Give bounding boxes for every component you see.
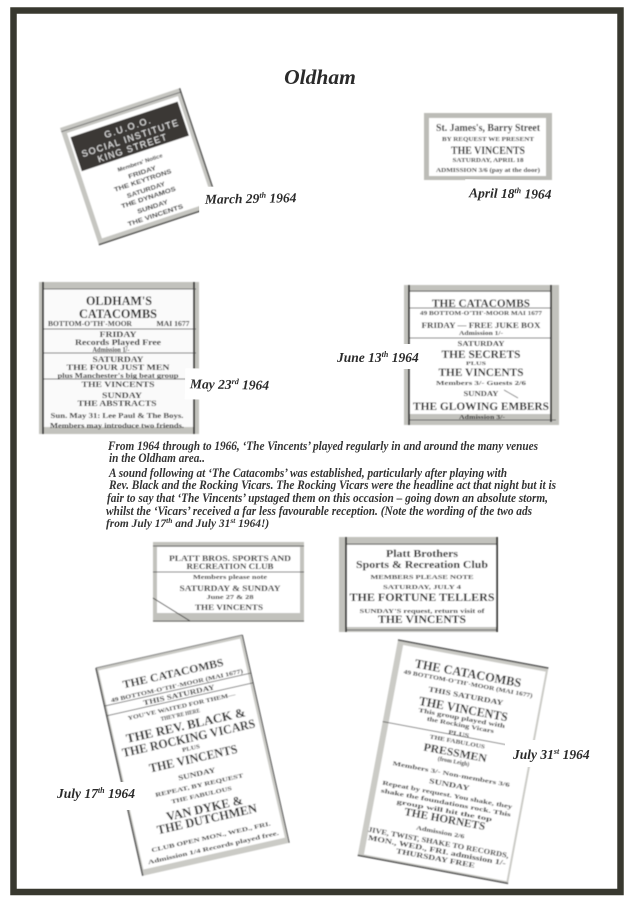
date label: July 17th 1964: July 17 bbox=[57, 786, 98, 801]
ad: Oldham's Catacombs: plus Manchester's big beat group bbox=[58, 372, 179, 380]
ad: G.U.O.O. Social Institute: FRIDAY bbox=[128, 166, 157, 181]
dark heading band bbox=[70, 102, 189, 171]
date label: July 31st 1964: 1964 bbox=[559, 747, 590, 762]
ad: The Catacombs, July 31st: THE FABULOUS bbox=[429, 734, 486, 751]
text block bbox=[106, 439, 556, 530]
date label: May 23rd 1964 bbox=[185, 368, 277, 401]
date label: July 17th 1964: th bbox=[98, 786, 105, 795]
ad: Platt Brothers Sports & Recreation Club: THE VINCENTS bbox=[378, 614, 466, 626]
ad: The Catacombs, July 31st: THURSDAY FREE bbox=[395, 847, 476, 870]
ad: The Catacombs, July 31st: Admission 2/6 bbox=[416, 826, 465, 841]
date label: March 29th 1964 bbox=[199, 185, 310, 217]
ad: The Catacombs, June: 49 BOTTOM-O'TH'-MOOR MAI 1677 bbox=[420, 310, 543, 317]
ad: Platt Bros. Sports and Recreation Club: RECREATION CLUB bbox=[186, 562, 274, 571]
text block: fair to say that ‘The Vincents’ upstaged them on this occasion – going down an absolute storm, bbox=[107, 491, 548, 505]
ad: The Catacombs, June: THE GLOWING EMBERS bbox=[413, 399, 549, 413]
ad: The Catacombs, July 17th: THE CATACOMBS bbox=[121, 655, 225, 691]
ad: The Catacombs, July 17th: THE DUTCHMEN bbox=[156, 801, 258, 837]
ad: The Catacombs, June: PLUS bbox=[466, 361, 486, 367]
date label: June 13th 1964: 1964 bbox=[388, 350, 419, 365]
ad: The Catacombs, July 17th: 49 BOTTOM-O'TH'-MOOR (MAI 1677) bbox=[110, 668, 244, 704]
ad: The Catacombs, June: THE VINCENTS bbox=[438, 365, 524, 379]
date label: March 29th 1964: March 29 bbox=[205, 191, 259, 207]
ad: The Catacombs, June bbox=[404, 285, 559, 425]
text block: 1964!) bbox=[235, 518, 269, 530]
ad: Platt Brothers Sports & Recreation Club: SUNDAY'S request, return visit of bbox=[360, 608, 486, 615]
ad: The Catacombs, July 31st: PLUS bbox=[448, 729, 470, 740]
ad: St. James's, Barry Street: ADMISSION 3/6 (pay at the door) bbox=[436, 167, 540, 174]
ad: The Catacombs, July 31st: SUNDAY bbox=[428, 776, 471, 793]
ad: G.U.O.O. Social Institute bbox=[60, 88, 218, 245]
ad: Oldham's Catacombs: CATACOMBS bbox=[79, 306, 157, 321]
ad: Oldham's Catacombs: SUNDAY bbox=[102, 391, 142, 400]
ad: Platt Bros. Sports and Recreation Club: June 27 & 28 bbox=[206, 595, 254, 601]
date label: April 18th 1964 bbox=[465, 179, 575, 209]
ad: The Catacombs, July 17th: PLUS bbox=[182, 744, 201, 754]
ad: G.U.O.O. Social Institute: SATURDAY bbox=[126, 182, 166, 200]
ad: Platt Bros. Sports and Recreation Club bbox=[153, 542, 304, 622]
ad: Oldham's Catacombs: Sun. May 31: Lee Paul & The Boys. bbox=[50, 412, 184, 420]
text block: and July 31 bbox=[172, 518, 230, 530]
ad: G.U.O.O. Social Institute: G.U.O.O. bbox=[103, 115, 152, 140]
ad: The Catacombs, June: Members 3/- Guests 2/6 bbox=[436, 381, 526, 387]
text block: Rev. Black and the Rocking Vicars. The Rocking Vicars were the headline act that night but it is bbox=[108, 478, 556, 492]
ad: Platt Brothers Sports & Recreation Club: Sports & Recreation Club bbox=[356, 560, 488, 571]
date label: April 18th 1964: 1964 bbox=[521, 186, 552, 202]
date label: March 29th 1964: th bbox=[259, 191, 267, 200]
ad: The Catacombs, July 17th: Admission 1/4 Records played free. bbox=[147, 830, 280, 866]
ad: The Catacombs, July 31st: MON., WED., FRI. admission 1/- bbox=[367, 834, 507, 868]
ad: The Catacombs, July 31st: This group played with bbox=[418, 707, 506, 730]
ad: Oldham's Catacombs: SATURDAY bbox=[92, 355, 144, 364]
ad: Platt Brothers Sports & Recreation Club bbox=[339, 537, 498, 632]
date label: June 13th 1964 bbox=[333, 344, 423, 369]
ad: St. James's, Barry Street bbox=[424, 113, 552, 180]
ad: The Catacombs, July 17th: THE FABULOUS bbox=[171, 785, 233, 806]
ad: The Catacombs, June: FRIDAY — FREE JUKE BOX bbox=[422, 320, 541, 330]
ad: Platt Brothers Sports & Recreation Club: MEMBERS PLEASE NOTE bbox=[370, 574, 474, 581]
ad: The Catacombs, July 31st: group will hit the top bbox=[396, 799, 493, 823]
date label: July 31st 1964 bbox=[505, 740, 595, 767]
ad: Platt Bros. Sports and Recreation Club: Members please note bbox=[193, 574, 267, 581]
ad: Oldham's Catacombs: THE ABSTRACTS bbox=[78, 399, 157, 408]
ad: The Catacombs, July 31st: shake the foundations rock. This bbox=[380, 787, 512, 819]
ad: Platt Brothers Sports & Recreation Club: THE FORTUNE TELLERS bbox=[350, 592, 494, 604]
ad: St. James's, Barry Street: SATURDAY, APRIL 18 bbox=[452, 158, 524, 164]
ad: G.U.O.O. Social Institute: SUNDAY bbox=[137, 200, 169, 216]
ad: The Catacombs, July 17th: SUNDAY bbox=[177, 765, 217, 783]
date label: March 29th 1964: 1964 bbox=[266, 190, 297, 206]
ad: The Catacombs, July 17th: YOU'VE WAITED FOR THEM— bbox=[127, 691, 237, 722]
ad: G.U.O.O. Social Institute: KING STREET bbox=[96, 132, 168, 164]
text block: st bbox=[229, 516, 236, 525]
ad: Oldham's Catacombs: FRIDAY bbox=[100, 330, 137, 339]
ad: The Catacombs, July 31st: THE VINCENTS bbox=[418, 694, 509, 724]
title: Oldham bbox=[284, 65, 356, 89]
ad: Oldham's Catacombs: Admission 1/- bbox=[92, 346, 130, 354]
ad: The Catacombs, July 17th: THE ROCKING VICARS bbox=[121, 717, 257, 760]
ad: G.U.O.O. Social Institute: THE KEYTRONS bbox=[114, 169, 173, 194]
ad: Oldham's Catacombs: THE FOUR JUST MEN bbox=[66, 363, 170, 372]
ad: The Catacombs, July 17th: THE REV. BLACK & bbox=[125, 705, 247, 746]
ad: The Catacombs, July 17th: REPEAT, BY REQUEST bbox=[155, 772, 245, 799]
date label: May 23rd 1964: May 23 bbox=[190, 376, 232, 392]
ad: The Catacombs, June: Admission 1/- bbox=[459, 331, 503, 337]
ad: Oldham's Catacombs: MAI 1677 bbox=[156, 320, 190, 328]
ad: G.U.O.O. Social Institute: THE VINCENTS bbox=[127, 204, 184, 228]
ad: Oldham's Catacombs: THE VINCENTS bbox=[82, 380, 155, 389]
ad: G.U.O.O. Social Institute: SOCIAL INSTITUTE bbox=[80, 118, 179, 159]
ad: Oldham's Catacombs: Members may introduce two friends. bbox=[50, 422, 184, 430]
ad: The Catacombs, July 31st: JIVE, TWIST, SHAKE TO RECORDS, bbox=[367, 826, 510, 860]
ad: St. James's, Barry Street: BY REQUEST WE PRESENT bbox=[442, 136, 535, 143]
ad: The Catacombs, June: SUNDAY bbox=[464, 389, 499, 398]
date label: July 17th 1964: 1964 bbox=[105, 786, 135, 801]
ad: St. James's, Barry Street: St. James's, Barry Street bbox=[436, 123, 540, 134]
date label: May 23rd 1964: 1964 bbox=[239, 377, 270, 393]
ad: The Catacombs, June: THE SECRETS bbox=[442, 347, 521, 361]
date label: April 18th 1964: th bbox=[514, 186, 522, 195]
ad: The Catacombs, July 17th: THIS SATURDAY bbox=[143, 683, 216, 707]
date label: May 23rd 1964: rd bbox=[232, 377, 240, 386]
ad: Oldham's Catacombs: Records Played Free bbox=[75, 338, 162, 347]
ad: The Catacombs, June: THE CATACOMBS bbox=[432, 298, 530, 310]
ad: Oldham's Catacombs: OLDHAM'S bbox=[86, 293, 152, 308]
ad: Oldham's Catacombs bbox=[39, 282, 199, 434]
ad: The Catacombs, July 31st: Repeat by request. You shake, they bbox=[382, 780, 514, 811]
ad: The Catacombs, July 31st: THE CATACOMBS bbox=[414, 657, 522, 690]
ad: Platt Brothers Sports & Recreation Club: SATURDAY, JULY 4 bbox=[383, 584, 462, 591]
text block: in the Oldham area.. bbox=[109, 451, 205, 465]
text block: whilst the ‘Vicars’ received a far less favourable reception. (Note the wording of the two ads bbox=[106, 504, 532, 518]
ad: The Catacombs, July 31st: THIS SATURDAY bbox=[428, 686, 504, 707]
ad: The Catacombs, July 31st: the Rocking Vicars bbox=[426, 716, 495, 735]
date label: April 18th 1964: April 18 bbox=[469, 185, 515, 201]
text block: A sound following at ‘The Catacombs’ was established, particularly after playing with bbox=[108, 466, 507, 480]
ad: The Catacombs, July 17th: VAN DYKE & bbox=[165, 793, 244, 824]
ad: The Catacombs, July 17th: CLUB OPEN MON., WED., FRI. bbox=[151, 820, 272, 854]
ad: The Catacombs, July 31st: (from Leigh) bbox=[437, 755, 470, 768]
date label: July 31st 1964: July 31 bbox=[513, 747, 554, 762]
ad: The Catacombs, July 31st: THE HORNETS bbox=[403, 804, 487, 833]
ad: Platt Brothers Sports & Recreation Club: Platt Brothers bbox=[386, 549, 458, 560]
ad: Platt Bros. Sports and Recreation Club: PLATT BROS. SPORTS AND bbox=[169, 554, 291, 563]
text block: from July 17 bbox=[106, 518, 166, 530]
ad: The Catacombs, July 17th bbox=[96, 635, 289, 876]
ad: St. James's, Barry Street: THE VINCENTS bbox=[451, 145, 525, 157]
text block: th bbox=[166, 516, 172, 525]
ad: The Catacombs, July 17th: THE VINCENTS bbox=[148, 742, 239, 776]
text block: From 1964 through to 1966, ‘The Vincents’ played regularly in and around the many venues bbox=[107, 439, 538, 453]
date label: June 13th 1964: June 13 bbox=[337, 350, 382, 365]
ad: The Catacombs, July 31st: PRESSMEN bbox=[423, 740, 488, 765]
ad: Platt Bros. Sports and Recreation Club: THE VINCENTS bbox=[195, 603, 264, 612]
ad: The Catacombs, June: Admission 3/- bbox=[459, 414, 505, 421]
ad: The Catacombs, July 31st: Members 3/- Non-members 3/6 bbox=[392, 761, 510, 789]
ad: The Catacombs, July 31st: 49 BOTTOM-O'TH'-MOOR (MAI 1677) bbox=[403, 669, 533, 700]
ad: The Catacombs, June: SATURDAY bbox=[458, 340, 504, 348]
ad: G.U.O.O. Social Institute: THE DYNAMOS bbox=[121, 187, 177, 210]
date label: July 31st 1964: st bbox=[553, 747, 560, 756]
date label: June 13th 1964: th bbox=[382, 350, 389, 359]
ad: G.U.O.O. Social Institute: Members' Notice bbox=[117, 153, 164, 174]
ad: Oldham's Catacombs: BOTTOM-O'TH'-MOOR bbox=[48, 320, 133, 328]
ad: Platt Bros. Sports and Recreation Club: SATURDAY & SUNDAY bbox=[180, 583, 280, 593]
ad: The Catacombs, July 17th: THEY'RE HERE bbox=[160, 707, 201, 723]
date label: July 17th 1964 bbox=[52, 782, 140, 810]
ad: The Catacombs, July 31st bbox=[358, 640, 548, 883]
